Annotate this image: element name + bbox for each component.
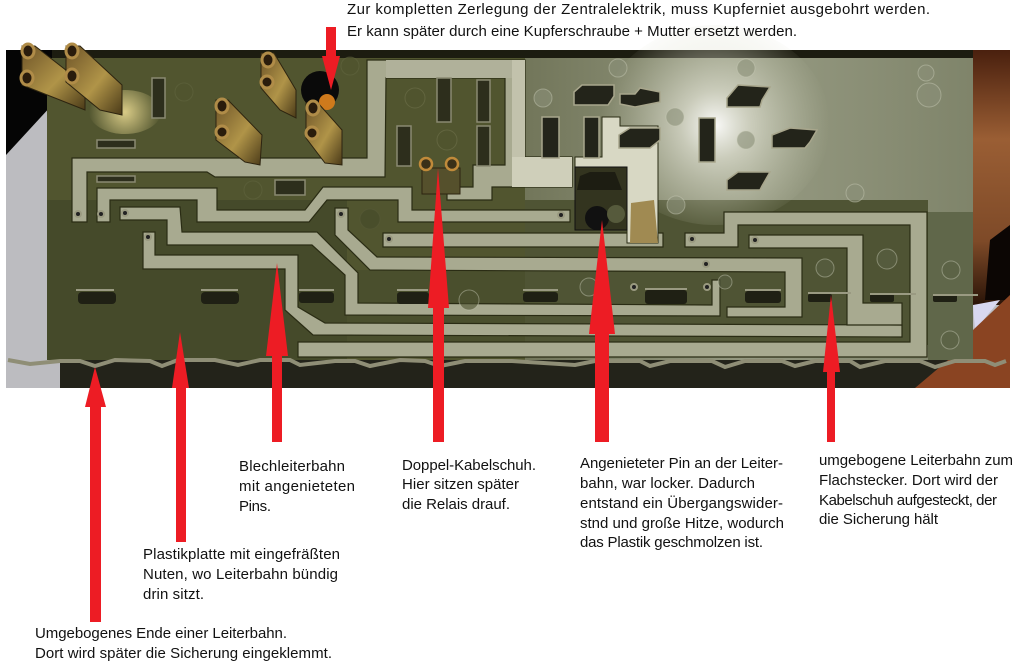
text: flat connector: umgebogene Leiterbahn zum (819, 452, 1013, 469)
flat pins: lower row (76, 289, 978, 304)
text: bent end (35, 625, 332, 662)
text: double cable shoe: Hier sitzen später (402, 476, 519, 493)
arrow: riveted pin (589, 220, 615, 442)
arrow: bent end (85, 367, 106, 622)
hole with copper rivet (301, 71, 339, 110)
photo: Zentralelektrik plate (6, 25, 1010, 388)
cable shoe 2 (66, 44, 122, 115)
text: sheet trace (239, 458, 355, 515)
reflection on left plate (89, 90, 161, 134)
text: riveted pin (580, 455, 784, 551)
light reflection on plate (600, 25, 830, 225)
text: riveted pin: bahn, war locker. Dadurch (580, 475, 755, 492)
trace: centre straight (383, 233, 663, 247)
trace: outer bottom and right (298, 212, 927, 357)
text: copper rivet note: Zur kompletten Zerlegung der Zentralelektrik, muss Kupferniet ausgebohrt werden. (347, 1, 930, 18)
bright metal near melted area (575, 117, 658, 243)
plate: right grey section (525, 58, 973, 360)
flat pins: upper right (542, 85, 817, 190)
dimples (175, 57, 960, 349)
text: plastic plate: Nuten, wo Leiterbahn bündig (143, 566, 338, 583)
arrow: double cable shoe (428, 168, 449, 442)
text: plastic plate: drin sitzt. (143, 586, 204, 603)
text: flat connector (819, 452, 1013, 528)
photo background (6, 50, 1010, 388)
arrow: flat connector (823, 295, 840, 442)
text: copper rivet note (347, 1, 930, 40)
text: copper rivet note: Er kann später durch eine Kupferschraube + Mutter ersetzt werden. (347, 23, 797, 40)
plate: left dark section (47, 58, 527, 360)
bent trace ends along bottom edge (8, 360, 1006, 367)
trace: middle with rivet stub (120, 207, 720, 316)
text: sheet trace: Pins. (239, 498, 271, 515)
arrow: sheet trace (266, 263, 288, 442)
text: flat connector: die Sicherung hält (819, 511, 939, 528)
cable shoe 3 (216, 99, 262, 165)
text: double cable shoe (402, 457, 536, 513)
arrow: plastic plate (172, 332, 189, 542)
cable shoe 4 (261, 53, 296, 118)
arrow: copper rivet (322, 27, 340, 90)
text: riveted pin: stnd und große Hitze, wodurch (580, 515, 784, 532)
trace: right step (749, 235, 902, 325)
text: sheet trace: mit angenieteten (239, 478, 355, 495)
text: riveted pin: Angenieteter Pin an der Leiter- (580, 455, 783, 472)
trace: upper long (97, 187, 570, 222)
trace: lower left (143, 232, 902, 337)
melted plastic area (575, 167, 627, 230)
metal traces (72, 60, 927, 357)
text: bent end: Dort wird später die Sicherung eingeklemmt. (35, 645, 332, 662)
double cable shoe (420, 158, 460, 194)
cable shoes (21, 44, 460, 194)
text: flat connector: Kabelschuh aufgesteckt, der (819, 492, 997, 509)
rivets (75, 210, 758, 290)
text: plastic plate (143, 546, 340, 603)
cable shoe 5 (306, 101, 342, 165)
cable shoe 1 (21, 44, 85, 110)
text: sheet trace: Blechleiterbahn (239, 458, 345, 475)
trace: diagonal centre (335, 208, 802, 317)
trace: top frame (72, 60, 572, 222)
rust stain (630, 200, 658, 243)
text: riveted pin: entstand ein Übergangswider- (580, 494, 783, 512)
text: riveted pin: das Plastik geschmolzen ist. (580, 534, 763, 551)
text: flat connector: Flachstecker. Dort wird der (819, 472, 998, 489)
flat pins: inner relay block (97, 78, 490, 195)
text: bent end: Umgebogenes Ende einer Leiterbahn. (35, 625, 287, 642)
text: double cable shoe: die Relais drauf. (402, 496, 510, 513)
text: double cable shoe: Doppel-Kabelschuh. (402, 457, 536, 474)
text: plastic plate: Plastikplatte mit eingefräßten (143, 546, 340, 563)
